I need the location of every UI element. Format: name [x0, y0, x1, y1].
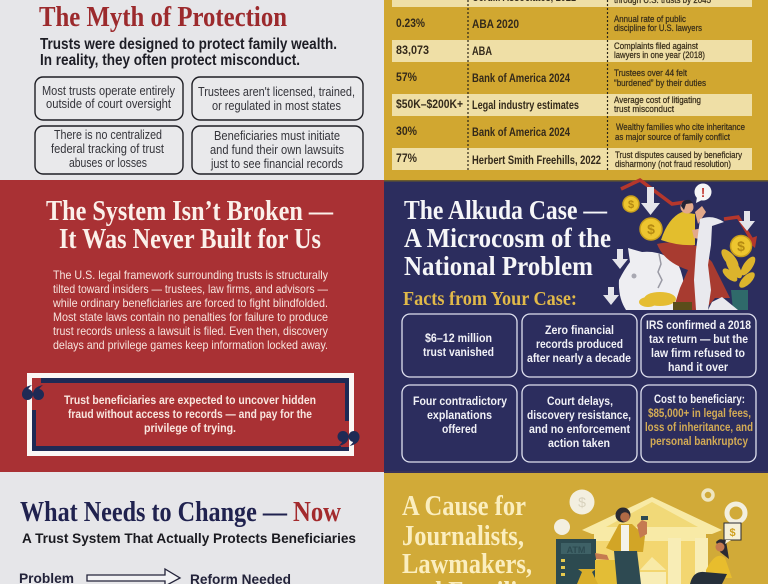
warning bubble: [694, 184, 712, 200]
woman seated: [716, 539, 729, 559]
table column: source: [472, 0, 601, 167]
table column: description: disharmony (not fraud resolution): [615, 159, 731, 169]
text: quote: privilege of trying.: [144, 423, 236, 435]
man: [657, 242, 730, 310]
subheading: protects beneficiaries: A Trust System That Actually Protects Beneficiaries: [22, 530, 356, 546]
card: trustees unlicensed: [192, 77, 363, 120]
table column: description: discipline for U.S. lawyers: [614, 23, 702, 33]
card: no federal tracking: There is no centralized: [54, 128, 162, 142]
heading: the system isn't broken: The System Isn’t Broken —: [46, 196, 333, 227]
heading: the alkuda case: The Alkuda Case —: [404, 194, 607, 225]
card: contradictory explanations: offered: [442, 422, 477, 436]
card: IRS confirmed: law firm refused to: [651, 346, 745, 360]
text block: legal framework: trust records unless a lawsuit is filed. Even then, discovery: [53, 324, 328, 338]
card: court delays: action taken: [548, 436, 610, 450]
table column: description: [614, 0, 745, 169]
table column: description: Annual rate of public: [614, 14, 686, 24]
card: zero records: records produced: [536, 337, 623, 351]
table column: description: “burdened” by their duties: [614, 78, 706, 88]
illustration: man with piggy bank and falling coins: $: [737, 238, 745, 254]
heading: the system isn't broken: [46, 196, 333, 255]
table column: statistic: 30%: [396, 126, 417, 138]
card: beneficiaries must sue: and fund their own lawsuits: [210, 143, 344, 157]
heading: a cause for journalists: [402, 490, 538, 584]
illustration: man with piggy bank and falling coins: !: [701, 185, 705, 200]
card: beneficiaries must sue: [192, 126, 363, 174]
heading: the system isn't broken: It Was Never Built for Us: [59, 224, 321, 255]
icon: opening quote: [22, 385, 44, 400]
table column: statistic: 0.23%: [396, 18, 425, 30]
card: IRS confirmed: tax return — but the: [649, 332, 748, 346]
text block: legal framework: The U.S. legal framework surrounding trusts is structurally: [53, 268, 328, 282]
table column: statistic: [396, 18, 463, 165]
text block: legal framework: while ordinary beneficiaries are forced to fight blindfolded.: [52, 296, 328, 310]
card: no federal tracking: [35, 126, 183, 174]
card: no federal tracking: federal tracking of trust: [51, 142, 164, 156]
panel: what needs to change: [0, 472, 384, 584]
bank: [582, 497, 722, 534]
card: trustees unlicensed: Trustees aren't licensed, trained,: [198, 85, 355, 99]
table column: description: Trustees over 44 felt: [614, 68, 687, 78]
card: trust vanished: [402, 314, 517, 377]
card: court delays: and no enforcement: [529, 422, 630, 436]
plant: [731, 290, 748, 310]
piggy bank: [619, 248, 684, 310]
text block: legal framework: [52, 268, 328, 352]
table column: source: ABA: [472, 46, 492, 58]
heading: the alkuda case: A Microcosm of the: [404, 222, 611, 253]
text: quote: fraud without access to records — and pay for the: [68, 409, 312, 421]
panel: the myth of protection: [0, 0, 384, 180]
table column: statistic: 83,073: [396, 45, 429, 57]
ATM: [556, 539, 596, 584]
card: beneficiaries must sue: Beneficiaries must initiate: [214, 129, 340, 143]
text block: legal framework: delays and privilege games keep information locked away.: [53, 338, 328, 352]
card: IRS confirmed: [641, 314, 756, 377]
speech bubble: [724, 523, 741, 540]
card: court delays: [522, 385, 637, 462]
subheading: myth statement: In reality, they often protect misconduct.: [40, 52, 300, 69]
heading: a cause for journalists: A Cause for: [402, 490, 526, 522]
panel: the alkuda case: [384, 180, 768, 472]
icon: closing quote: [338, 431, 360, 446]
table column: statistic: 77%: [396, 153, 417, 165]
illustration: man with piggy bank and falling coins: $: [628, 199, 634, 211]
table column: source: Herbert Smith Freehills, 2022: [472, 155, 601, 167]
text block: legal framework: tilted toward insiders — trustees, law firms, and advisors —: [53, 282, 328, 296]
table column: description: Complaints filed against: [614, 41, 698, 51]
text: quote: [64, 395, 316, 435]
card: court oversight: outside of court oversight: [46, 97, 171, 111]
table column: description: Wealthy families who cite inheritance: [616, 122, 745, 132]
panel: the system isn't broken: [0, 180, 384, 472]
illustration: bank, ATM and people: [554, 490, 745, 584]
table column: description: Average cost of litigating: [614, 95, 701, 105]
table column: statistic: 57%: [396, 72, 417, 84]
illustration: man with piggy bank and falling coins: [603, 180, 758, 310]
card: court delays: discovery resistance,: [527, 408, 631, 422]
text block: legal framework: Most state laws contain no penalties for failure to produce: [53, 310, 328, 324]
illustration: bank, ATM and people: $: [729, 527, 736, 539]
arrows: [603, 187, 755, 305]
heading: the myth of protection: The Myth of Protection: [39, 2, 287, 33]
card: zero records: Zero financial: [545, 323, 614, 337]
panel: statistics table: [384, 0, 768, 180]
table column: description: trust misconduct: [614, 104, 674, 114]
card: trust vanished: trust vanished: [423, 345, 494, 359]
panel: a cause for journalists: [384, 471, 768, 584]
card: trustees unlicensed: or regulated in most states: [212, 99, 341, 113]
callout: quote box: [22, 373, 360, 456]
card: trust vanished: $6–12 million: [425, 331, 492, 345]
card: court oversight: [35, 77, 183, 120]
heading: the alkuda case: [404, 194, 611, 281]
heading: what needs to change now: What Needs to Change —: [20, 497, 288, 528]
card: cost to beneficiary: Cost to beneficiary:: [654, 392, 745, 406]
table column: source: Bank of America 2024: [472, 127, 570, 139]
card: IRS confirmed: IRS confirmed a 2018: [646, 318, 751, 332]
table column: statistic: $50K–$200K+: [396, 99, 463, 111]
card: contradictory explanations: [402, 385, 517, 462]
text: quote: Trust beneficiaries are expected to uncover hidden: [64, 395, 316, 407]
table column: description: Trust disputes caused by beneficiary: [615, 150, 742, 160]
card: court oversight: Most trusts operate entirely: [42, 84, 176, 98]
illustration: bank, ATM and people: $: [578, 494, 586, 510]
subheading: myth statement: [40, 36, 337, 69]
heading: what needs to change now: Now: [293, 497, 342, 528]
coin stack: [595, 560, 617, 584]
receipt: [694, 217, 724, 310]
illustration: bank, ATM and people: ATM: [567, 545, 585, 555]
heading: a cause for journalists: Journalists,: [402, 520, 524, 552]
table column: source: Bank of America 2024: [472, 73, 570, 85]
card: zero records: [522, 314, 637, 377]
card: IRS confirmed: hand it over: [668, 360, 728, 374]
card: cost to beneficiary: [641, 385, 756, 462]
red falling line left: [621, 180, 686, 204]
gears: [703, 490, 713, 500]
woman standing: [616, 508, 630, 522]
illustration: man with piggy bank and falling coins: $: [647, 221, 655, 237]
heading: a cause for journalists: Lawmakers,: [402, 548, 532, 580]
subheading: facts from your case: Facts from Your Case:: [403, 288, 577, 310]
card: court delays: Court delays,: [547, 394, 613, 408]
table column: description: as major source of family conflict: [615, 132, 730, 142]
card: contradictory explanations: explanations: [427, 408, 492, 422]
coins: [623, 196, 752, 256]
table column: source: Legal industry estimates: [472, 100, 579, 112]
subheading: myth statement: Trusts were designed to protect family wealth.: [40, 36, 337, 53]
table column: description: lawyers in one year (2018): [614, 50, 705, 60]
card: cost to beneficiary: personal bankruptcy: [650, 434, 748, 448]
card: zero records: after nearly a decade: [527, 351, 631, 365]
red falling line right: [724, 217, 752, 240]
card: no federal tracking: abuses or losses: [69, 156, 147, 170]
arrow: problem to reform: [87, 569, 180, 584]
heading: the alkuda case: National Problem: [404, 250, 593, 281]
card: contradictory explanations: Four contradictory: [413, 394, 507, 408]
table column: source: ABA 2020: [472, 19, 519, 31]
card: beneficiaries must sue: just to see financial records: [210, 157, 343, 171]
